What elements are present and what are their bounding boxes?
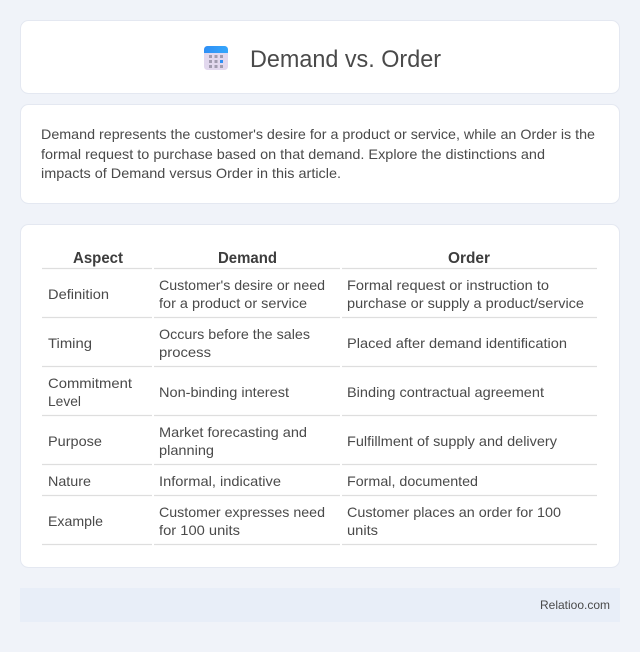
row: purpose <box>48 424 557 458</box>
row: commitment level: Commitment <box>48 375 132 391</box>
table header: Order <box>448 250 490 267</box>
row: example: Customer expresses need <box>159 504 325 520</box>
row: purpose: Purpose <box>48 433 102 449</box>
footer <box>20 588 620 622</box>
table header: Demand <box>218 250 277 267</box>
text block: introduction: impacts of Demand versus Order in this article. <box>41 165 341 181</box>
row: commitment level: Binding contractual agreement <box>347 384 544 400</box>
row: definition: for a product or service <box>159 295 307 311</box>
icon: calendar <box>204 46 228 70</box>
row: timing: Timing <box>48 335 92 351</box>
row: purpose: Market forecasting and <box>159 424 307 440</box>
row: definition: Definition <box>48 286 109 302</box>
row: definition: purchase or supply a product/service <box>347 295 584 311</box>
row: timing: process <box>159 344 211 360</box>
row: example: Example <box>48 513 103 529</box>
row: nature: Formal, documented <box>347 473 478 489</box>
row: purpose: Fulfillment of supply and delivery <box>347 433 557 449</box>
heading: Demand vs. Order <box>250 46 441 73</box>
row: example <box>48 504 561 538</box>
row: timing: Placed after demand identification <box>347 335 567 351</box>
text block: introduction: formal request to purchase based on that demand. Explore the distinctions and <box>41 146 545 162</box>
text block: introduction <box>41 126 595 181</box>
row: commitment level <box>48 375 544 409</box>
panel: title <box>20 20 620 94</box>
panel: comparison table <box>20 224 620 568</box>
panel: introduction <box>20 104 620 204</box>
row: definition <box>48 277 584 311</box>
footer: Relatioo.com <box>540 598 610 612</box>
table header: Aspect <box>73 250 124 267</box>
row: nature: Informal, indicative <box>159 473 281 489</box>
row: nature <box>48 473 478 489</box>
row: example: Customer places an order for 100 <box>347 504 561 520</box>
row: timing <box>48 326 567 360</box>
row: example: units <box>347 522 378 538</box>
row: nature: Nature <box>48 473 91 489</box>
row: timing: Occurs before the sales <box>159 326 310 342</box>
row: definition: Customer's desire or need <box>159 277 325 293</box>
row: purpose: planning <box>159 442 214 458</box>
table header <box>73 250 490 267</box>
row: commitment level: Level <box>48 393 81 409</box>
row: definition: Formal request or instruction to <box>347 277 549 293</box>
row: example: for 100 units <box>159 522 240 538</box>
text block: introduction: Demand represents the customer's desire for a product or service, while an Order is the <box>41 126 595 142</box>
row: commitment level: Non-binding interest <box>159 384 289 400</box>
